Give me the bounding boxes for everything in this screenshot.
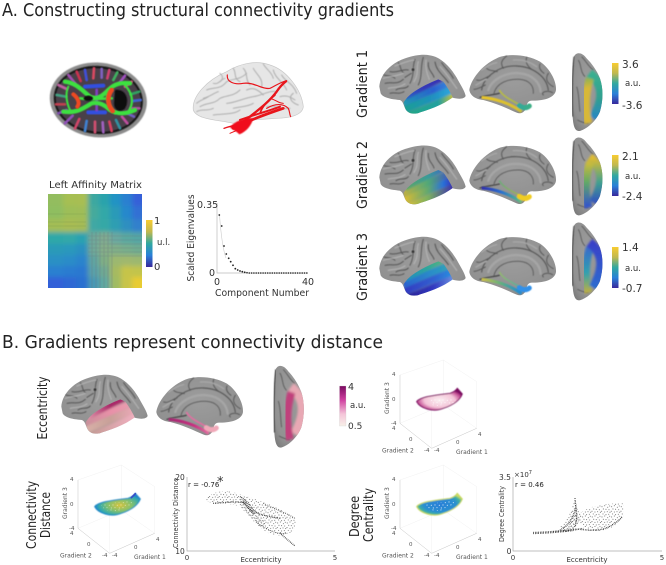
scatter: connectivity distance vs eccentricity: * bbox=[217, 475, 224, 490]
3D scatter: eccentricity: 4 bbox=[478, 432, 482, 438]
3D scatter: degree centrality: Gradient 1 bbox=[456, 554, 488, 561]
legend: eccentricity colourbar: 4 bbox=[348, 382, 354, 393]
3D scatter: eccentricity: 0 bbox=[409, 437, 413, 443]
3D scatter: connectivity distance: Gradient 1 bbox=[134, 554, 166, 561]
3D scatter: degree centrality: -4 bbox=[424, 553, 430, 559]
3D scatter: eccentricity: 4 bbox=[392, 426, 396, 432]
chart: scaled eigenvalues scree plot: Scaled Eigenvalues bbox=[186, 194, 197, 282]
heading: affinity matrix: Left Affinity Matrix bbox=[49, 180, 142, 191]
scatter: connectivity distance vs eccentricity: 5 bbox=[333, 554, 337, 562]
chart: affinity matrix heatmap bbox=[48, 194, 142, 288]
scatter: degree centrality vs eccentricity: 7 bbox=[529, 470, 532, 476]
legend: gradient 3 colourbar: 1.4 bbox=[622, 242, 639, 254]
3D scatter: eccentricity: Gradient 1 bbox=[456, 449, 488, 456]
3D scatter: degree centrality: 4 bbox=[392, 477, 396, 483]
3D scatter: eccentricity bbox=[382, 360, 488, 456]
3D scatter: eccentricity: -4 bbox=[391, 421, 397, 427]
brain: gradient 2 medial bbox=[469, 146, 556, 204]
3D scatter: connectivity distance: -4 bbox=[69, 526, 75, 532]
row label: Gradient 1: Gradient 1 bbox=[355, 50, 371, 118]
row label: Gradient 3: Gradient 3 bbox=[355, 233, 371, 301]
3D scatter: eccentricity: -4 bbox=[424, 448, 430, 454]
3D scatter: connectivity distance: Gradient 3 bbox=[62, 487, 69, 519]
row label: Degree Centrality bbox=[347, 488, 377, 542]
legend: eccentricity colourbar: a.u. bbox=[350, 401, 366, 411]
3D scatter: eccentricity: Gradient 3 bbox=[384, 382, 391, 414]
brain: eccentricity lateral bbox=[61, 375, 148, 436]
3D scatter: eccentricity: Gradient 2 bbox=[382, 448, 414, 454]
chart: scaled eigenvalues scree plot: 0 bbox=[209, 268, 215, 279]
3D scatter: connectivity distance: 4 bbox=[70, 477, 74, 483]
chart: scaled eigenvalues scree plot bbox=[186, 194, 314, 299]
brain: eccentricity ventral bbox=[274, 366, 304, 448]
3D scatter: connectivity distance: Gradient 2 bbox=[60, 552, 92, 560]
scatter: degree centrality vs eccentricity: 3.5 bbox=[499, 473, 511, 482]
legend: affinity colourbar: u.l. bbox=[157, 238, 170, 248]
legend: gradient 3 colourbar bbox=[612, 242, 642, 295]
brain: gradient 3 ventral bbox=[572, 223, 602, 300]
3D scatter: degree centrality: 4 bbox=[478, 537, 482, 543]
3D scatter: connectivity distance: -4 bbox=[102, 553, 108, 559]
scatter: connectivity distance vs eccentricity: 0 bbox=[185, 554, 189, 562]
row label: Eccentricity: Eccentricity bbox=[35, 376, 51, 440]
3D scatter: degree centrality: 4 bbox=[392, 531, 396, 537]
3D scatter: connectivity distance: 0 bbox=[134, 545, 138, 551]
row label: Connectivity Distance: Connectivity bbox=[24, 481, 40, 549]
3D scatter: eccentricity: 0 bbox=[456, 440, 460, 446]
legend: gradient 2 colourbar: 2.1 bbox=[622, 151, 639, 163]
brain: gradient 3 lateral bbox=[379, 237, 466, 298]
brain: gradient 1 medial bbox=[469, 55, 556, 113]
chart: scaled eigenvalues scree plot: 0 bbox=[214, 277, 220, 288]
legend: eccentricity colourbar bbox=[340, 382, 366, 432]
scatter: connectivity distance vs eccentricity: Connectivity Distance bbox=[172, 478, 180, 548]
3D scatter: eccentricity: 4 bbox=[392, 372, 396, 378]
legend: gradient 2 colourbar: a.u. bbox=[625, 172, 641, 182]
legend: eccentricity colourbar: 0.5 bbox=[348, 422, 362, 432]
scatter: degree centrality vs eccentricity bbox=[498, 470, 664, 564]
3D scatter: connectivity distance: 4 bbox=[70, 531, 74, 537]
scatter: degree centrality vs eccentricity: 0 bbox=[507, 547, 512, 556]
3D scatter: connectivity distance: 0 bbox=[87, 542, 91, 548]
legend: gradient 2 colourbar: -2.4 bbox=[622, 191, 643, 203]
scatter: connectivity distance vs eccentricity: r = -0.76 bbox=[188, 481, 220, 489]
scatter: connectivity distance vs eccentricity: Eccentricity bbox=[240, 556, 282, 564]
3D scatter: degree centrality bbox=[382, 465, 488, 561]
3D scatter: degree centrality: 0 bbox=[456, 545, 460, 551]
brain: gradient 1 ventral bbox=[572, 53, 602, 131]
legend: gradient 1 colourbar: 3.6 bbox=[622, 59, 639, 71]
image: tractography axial brain slice bbox=[46, 58, 151, 142]
chart: scaled eigenvalues scree plot: 40 bbox=[302, 277, 314, 288]
3D scatter: degree centrality: 0 bbox=[409, 542, 413, 548]
3D scatter: degree centrality: Gradient 2 bbox=[382, 552, 414, 560]
brain: gradient 2 lateral bbox=[379, 145, 466, 207]
brain: gradient 2 ventral bbox=[572, 138, 602, 215]
row label: Connectivity Distance bbox=[24, 481, 54, 549]
brain: gradient 1 lateral bbox=[379, 55, 466, 116]
brain: eccentricity medial bbox=[156, 377, 243, 435]
legend: gradient 1 colourbar: -3.6 bbox=[622, 100, 643, 112]
heading: section B: B. Gradients represent connectivity distance bbox=[2, 332, 383, 353]
3D scatter: eccentricity: -4 bbox=[434, 448, 440, 454]
chart: scaled eigenvalues scree plot: Component Number bbox=[215, 288, 310, 299]
legend: affinity colourbar: 1 bbox=[154, 216, 160, 227]
legend: affinity colourbar bbox=[146, 216, 170, 273]
heading: section A: A. Constructing structural connectivity gradients bbox=[2, 0, 394, 21]
legend: gradient 2 colourbar bbox=[612, 151, 643, 203]
image: lateral brain with red fibre tract bbox=[193, 63, 303, 134]
chart: scaled eigenvalues scree plot: 0.35 bbox=[197, 200, 218, 211]
row label: Gradient 2: Gradient 2 bbox=[355, 141, 371, 209]
brain: gradient 3 medial bbox=[469, 237, 556, 295]
legend: gradient 1 colourbar: a.u. bbox=[625, 79, 641, 89]
3D scatter: connectivity distance: -4 bbox=[112, 553, 118, 559]
scatter: degree centrality vs eccentricity: 0 bbox=[511, 554, 515, 562]
row label: Degree Centrality: Degree bbox=[347, 496, 363, 537]
3D scatter: degree centrality: -4 bbox=[391, 526, 397, 532]
row label: Connectivity Distance: Distance bbox=[38, 492, 54, 538]
3D scatter: eccentricity: 0 bbox=[392, 397, 396, 403]
3D scatter: connectivity distance: 0 bbox=[70, 502, 74, 508]
3D scatter: degree centrality: Gradient 3 bbox=[384, 487, 391, 519]
3D scatter: connectivity distance: 4 bbox=[156, 537, 160, 543]
3D scatter: degree centrality: -4 bbox=[434, 553, 440, 559]
scatter: connectivity distance vs eccentricity: 20 bbox=[175, 473, 185, 482]
scatter: degree centrality vs eccentricity: ×10 bbox=[514, 471, 529, 479]
scatter: degree centrality vs eccentricity: Degree Centrality bbox=[498, 486, 506, 542]
legend: gradient 3 colourbar: a.u. bbox=[625, 264, 641, 274]
scatter: connectivity distance vs eccentricity: 10 bbox=[175, 547, 185, 556]
3D scatter: degree centrality: 0 bbox=[392, 502, 396, 508]
scatter: degree centrality vs eccentricity: r = 0.46 bbox=[515, 481, 544, 489]
scatter: degree centrality vs eccentricity: 5 bbox=[660, 554, 664, 562]
scatter: connectivity distance vs eccentricity bbox=[172, 473, 337, 564]
legend: affinity colourbar: 0 bbox=[154, 262, 160, 273]
legend: gradient 3 colourbar: -0.7 bbox=[622, 283, 642, 295]
legend: gradient 1 colourbar bbox=[612, 59, 643, 112]
3D scatter: connectivity distance bbox=[60, 465, 166, 561]
scatter: degree centrality vs eccentricity: Eccentricity bbox=[566, 556, 608, 564]
row label: Degree Centrality: Centrality bbox=[361, 488, 377, 542]
